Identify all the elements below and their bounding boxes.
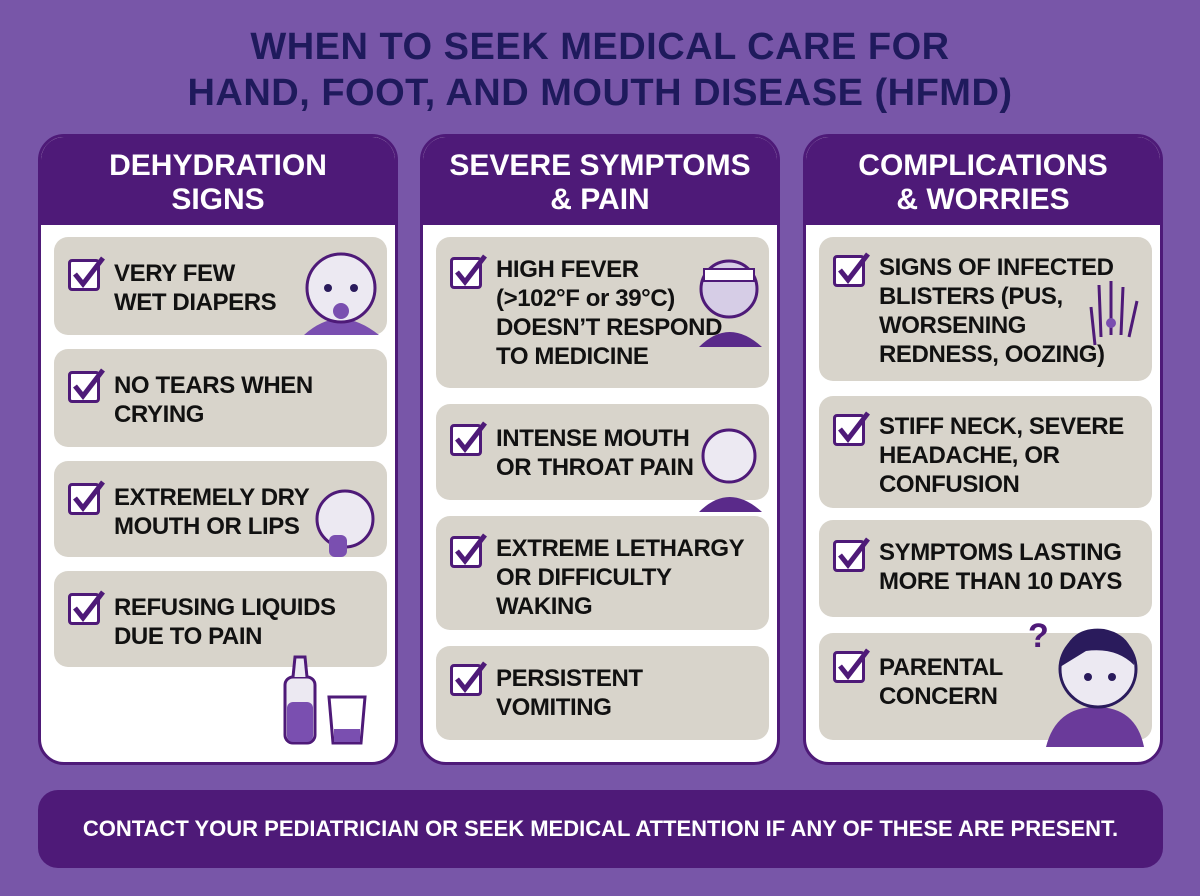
item: infected blisters: SIGNS OF INFECTED xyxy=(879,254,1114,281)
title xyxy=(187,26,1013,114)
item: symptoms lasting xyxy=(819,520,1152,617)
item: dry mouth: MOUTH OR LIPS xyxy=(114,513,299,540)
panel: severe symptoms xyxy=(420,134,780,765)
heading: severe: & PAIN xyxy=(550,183,650,216)
item: lethargy: OR DIFFICULTY xyxy=(496,564,672,591)
item: high fever: DOESN’T RESPOND xyxy=(496,314,722,341)
heading: dehydration: SIGNS xyxy=(171,183,265,216)
item: stiff neck: STIFF NECK, SEVERE xyxy=(879,413,1124,440)
item: refusing liquids: DUE TO PAIN xyxy=(114,623,262,650)
heading: severe: SEVERE SYMPTOMS xyxy=(449,149,751,182)
icon: worried child xyxy=(1028,617,1144,747)
item: refusing liquids: REFUSING LIQUIDS xyxy=(114,594,336,621)
item: high fever xyxy=(436,237,769,388)
item: infected blisters: BLISTERS (PUS, xyxy=(879,283,1063,310)
icon: child throat pain xyxy=(699,428,762,512)
item: wet diapers: WET DIAPERS xyxy=(114,289,276,316)
heading: severe xyxy=(423,137,777,225)
item: vomiting: VOMITING xyxy=(496,694,611,721)
icon: child with fever xyxy=(699,260,762,347)
item: lethargy xyxy=(436,516,769,630)
item: stiff neck: HEADACHE, OR xyxy=(879,442,1060,469)
footer banner xyxy=(38,790,1163,868)
item: refusing liquids xyxy=(54,571,387,667)
panel: dehydration signs xyxy=(38,134,398,765)
item: no tears: CRYING xyxy=(114,401,204,428)
title: HAND, FOOT, AND MOUTH DISEASE (HFMD) xyxy=(187,72,1013,114)
item: dry mouth: EXTREMELY DRY xyxy=(114,484,309,511)
item: lethargy: EXTREME LETHARGY xyxy=(496,535,744,562)
item: mouth pain: OR THROAT PAIN xyxy=(496,454,694,481)
item: no tears xyxy=(54,349,387,447)
item: vomiting: PERSISTENT xyxy=(496,665,643,692)
item: vomiting xyxy=(436,646,769,740)
item: no tears: NO TEARS WHEN xyxy=(114,372,313,399)
item: wet diapers xyxy=(54,237,387,335)
title: WHEN TO SEEK MEDICAL CARE FOR xyxy=(250,26,950,68)
item: infected blisters: WORSENING xyxy=(879,312,1026,339)
item: wet diapers: VERY FEW xyxy=(114,260,235,287)
item: dry mouth xyxy=(54,461,387,557)
item: high fever: (>102°F or 39°C) xyxy=(496,285,675,312)
item: lethargy: WAKING xyxy=(496,593,592,620)
item: mouth pain: INTENSE MOUTH xyxy=(496,425,689,452)
heading: complications: & WORRIES xyxy=(896,183,1070,216)
item: mouth pain xyxy=(436,404,769,500)
item: infected blisters xyxy=(819,237,1152,381)
item: high fever: HIGH FEVER xyxy=(496,256,639,283)
item: parental concern: CONCERN xyxy=(879,683,998,710)
item: symptoms lasting: SYMPTOMS LASTING xyxy=(879,539,1122,566)
item: high fever: TO MEDICINE xyxy=(496,343,649,370)
icon: baby touching mouth xyxy=(316,490,374,557)
icon: hand xyxy=(1090,281,1138,346)
heading: complications: COMPLICATIONS xyxy=(858,149,1108,182)
icon: baby xyxy=(304,252,379,335)
panel: complications xyxy=(803,134,1163,765)
item: symptoms lasting: MORE THAN 10 DAYS xyxy=(879,568,1122,595)
item: parental concern xyxy=(819,633,1152,740)
item: stiff neck: CONFUSION xyxy=(879,471,1019,498)
item: infected blisters: REDNESS, OOZING) xyxy=(879,341,1105,368)
item: stiff neck xyxy=(819,396,1152,508)
heading: dehydration xyxy=(41,137,395,225)
heading: dehydration: DEHYDRATION xyxy=(109,149,327,182)
heading: complications xyxy=(806,137,1160,225)
item: parental concern: PARENTAL xyxy=(879,654,1003,681)
icon: worried child: ? xyxy=(1028,617,1049,655)
footer banner: CONTACT YOUR PEDIATRICIAN OR SEEK MEDICAL ATTENTION IF ANY OF THESE ARE PRESENT. xyxy=(83,816,1118,841)
icon: bottle and cup xyxy=(284,656,367,744)
